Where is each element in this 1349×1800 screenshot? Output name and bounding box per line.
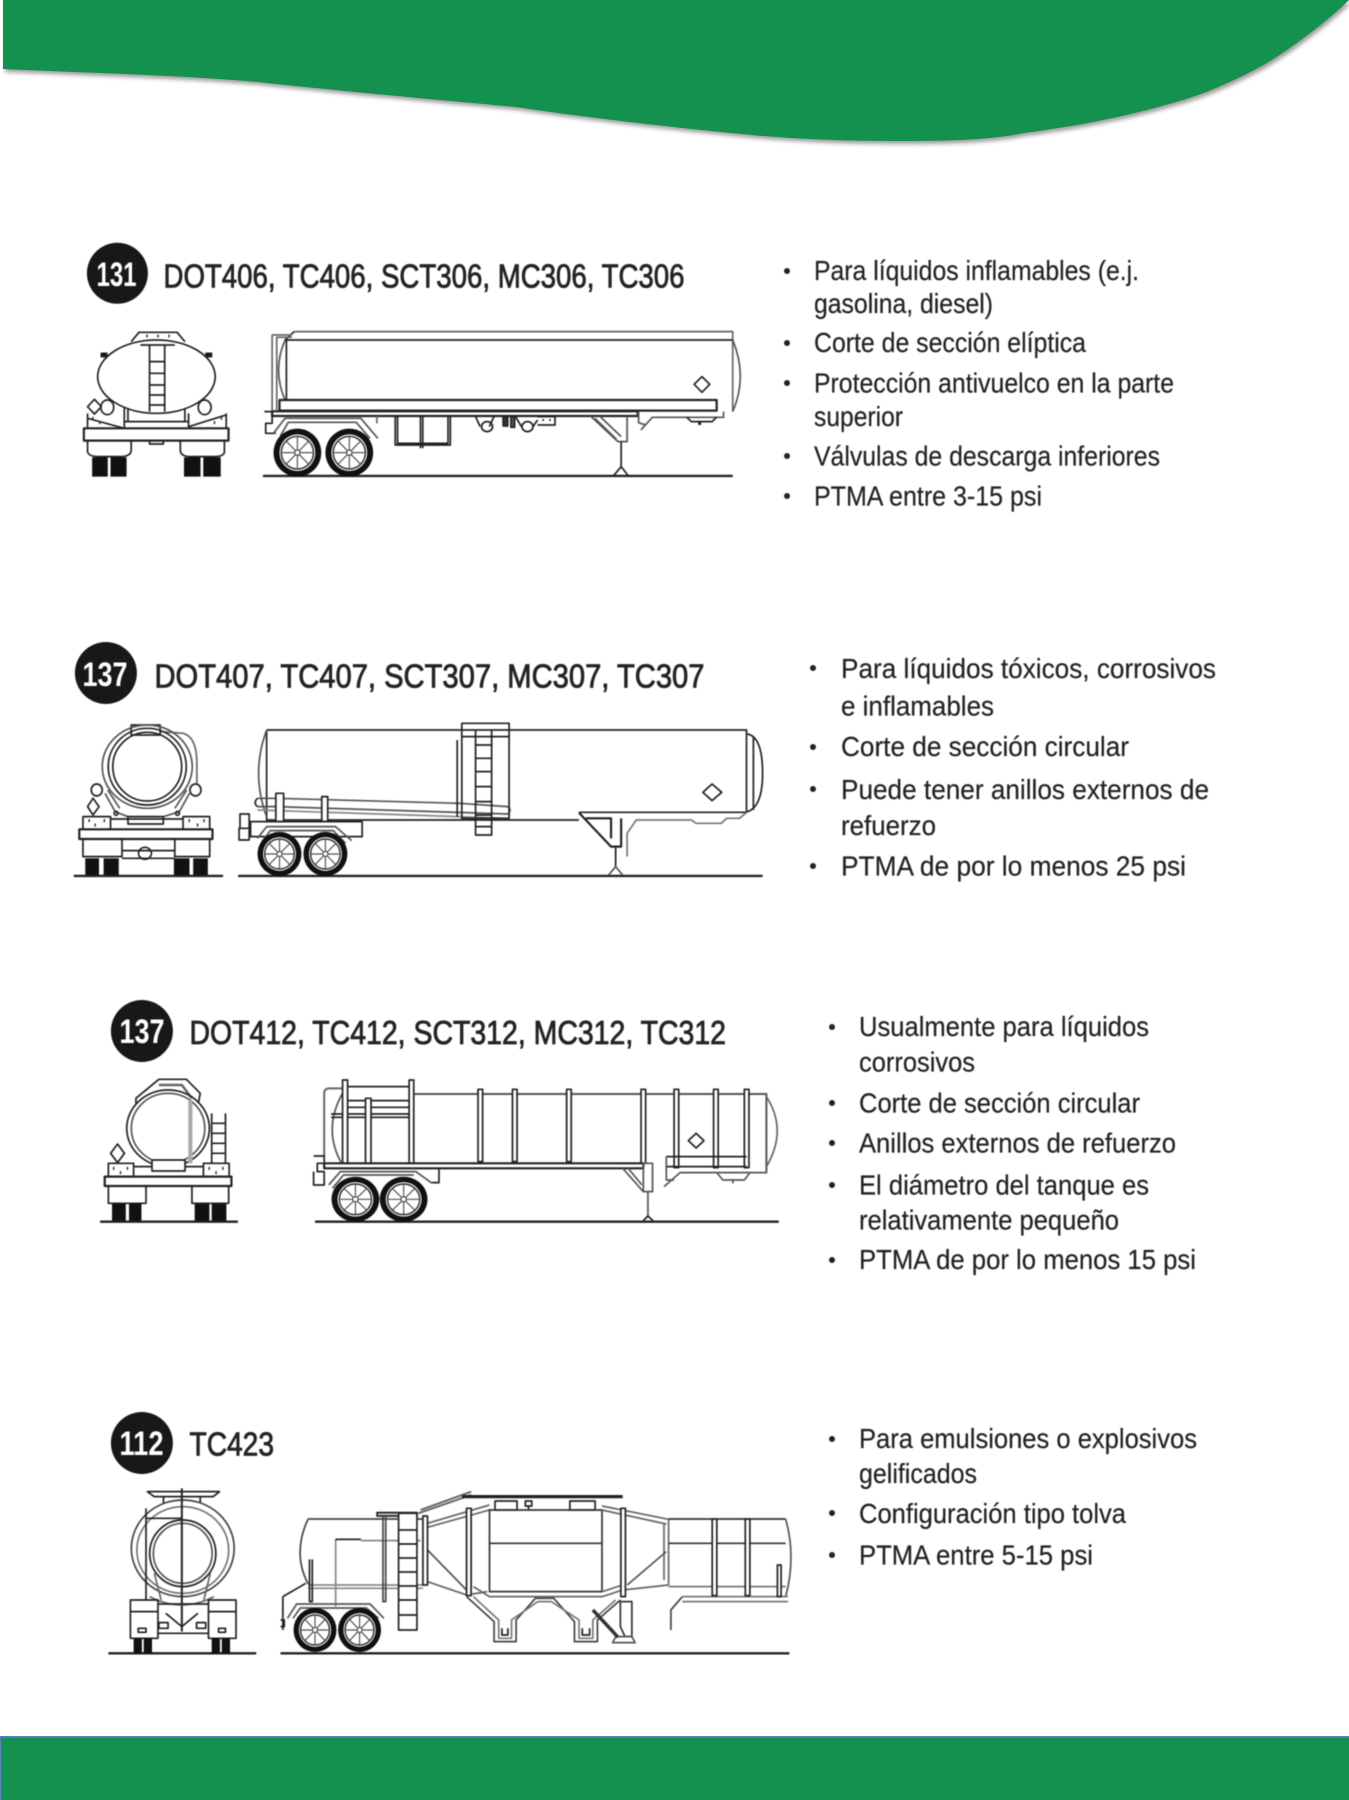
bullet list: Protección antivuelco en la parte [814, 368, 1174, 399]
bullet list: Válvulas de descarga inferiores [814, 441, 1160, 472]
bullet list: Configuración tipo tolva [859, 1498, 1127, 1529]
badge 112 [111, 1412, 173, 1474]
heading: TC423 [190, 1427, 274, 1464]
bullet list: Corte de sección circular [841, 731, 1129, 762]
badge 137: 137 [82, 656, 128, 694]
badge 137 [75, 642, 137, 704]
bullet list: Anillos externos de refuerzo [859, 1128, 1176, 1158]
bullet list: Usualmente para líquidos [859, 1011, 1149, 1042]
bullet list: PTMA de por lo menos 15 psi [859, 1244, 1196, 1275]
side view trailer [263, 332, 740, 477]
bullet list [810, 653, 1216, 882]
bullet list: El diámetro del tanque es [859, 1170, 1149, 1200]
bullet list: corrosivos [859, 1046, 975, 1078]
bullet list: Corte de sección elíptica [814, 327, 1087, 358]
rear view truck [108, 1488, 256, 1653]
bullet list: gelificados [859, 1458, 977, 1489]
heading: DOT406, TC406, SCT306, MC306, TC306 [164, 258, 684, 296]
rear view truck [84, 332, 229, 477]
bullet list: superior [814, 401, 903, 432]
heading: DOT407, TC407, SCT307, MC307, TC307 [154, 658, 704, 695]
panel: TC423 [108, 1412, 1197, 1653]
bullet list: PTMA entre 5-15 psi [859, 1540, 1093, 1570]
bullet list [829, 1011, 1196, 1275]
bullet list: gasolina, diesel) [814, 288, 993, 319]
rear view truck [100, 1079, 238, 1222]
rear view truck [74, 725, 223, 876]
bullet list: e inflamables [841, 690, 994, 722]
badge 137 [111, 1000, 173, 1062]
badge 131 [87, 243, 148, 304]
bullet list [784, 255, 1174, 512]
bullet list: Para líquidos tóxicos, corrosivos [841, 653, 1216, 684]
bullet list: Puede tener anillos externos de [841, 774, 1209, 805]
header: green wave [3, 0, 1349, 141]
side view trailer [281, 1492, 791, 1653]
bullet list [829, 1423, 1197, 1570]
panel: DOT412 [100, 1000, 1196, 1275]
badge 112: 112 [120, 1425, 164, 1463]
bullet list: relativamente pequeño [859, 1204, 1119, 1236]
side view trailer [314, 1080, 779, 1222]
heading: DOT412, TC412, SCT312, MC312, TC312 [190, 1015, 726, 1052]
badge 131: 131 [96, 256, 136, 294]
panel: DOT407 [74, 642, 1216, 882]
bullet list: refuerzo [841, 810, 936, 841]
badge 137: 137 [120, 1013, 164, 1051]
bullet list: Para emulsiones o explosivos [859, 1423, 1197, 1454]
side view trailer [238, 723, 763, 876]
footer: green band [0, 1736, 1349, 1800]
bullet list: Para líquidos inflamables (e.j. [814, 255, 1139, 286]
bullet list: PTMA entre 3-15 psi [814, 481, 1042, 512]
bullet list: PTMA de por lo menos 25 psi [841, 850, 1186, 882]
panel: DOT406 [84, 243, 1174, 512]
bullet list: Corte de sección circular [859, 1088, 1140, 1118]
